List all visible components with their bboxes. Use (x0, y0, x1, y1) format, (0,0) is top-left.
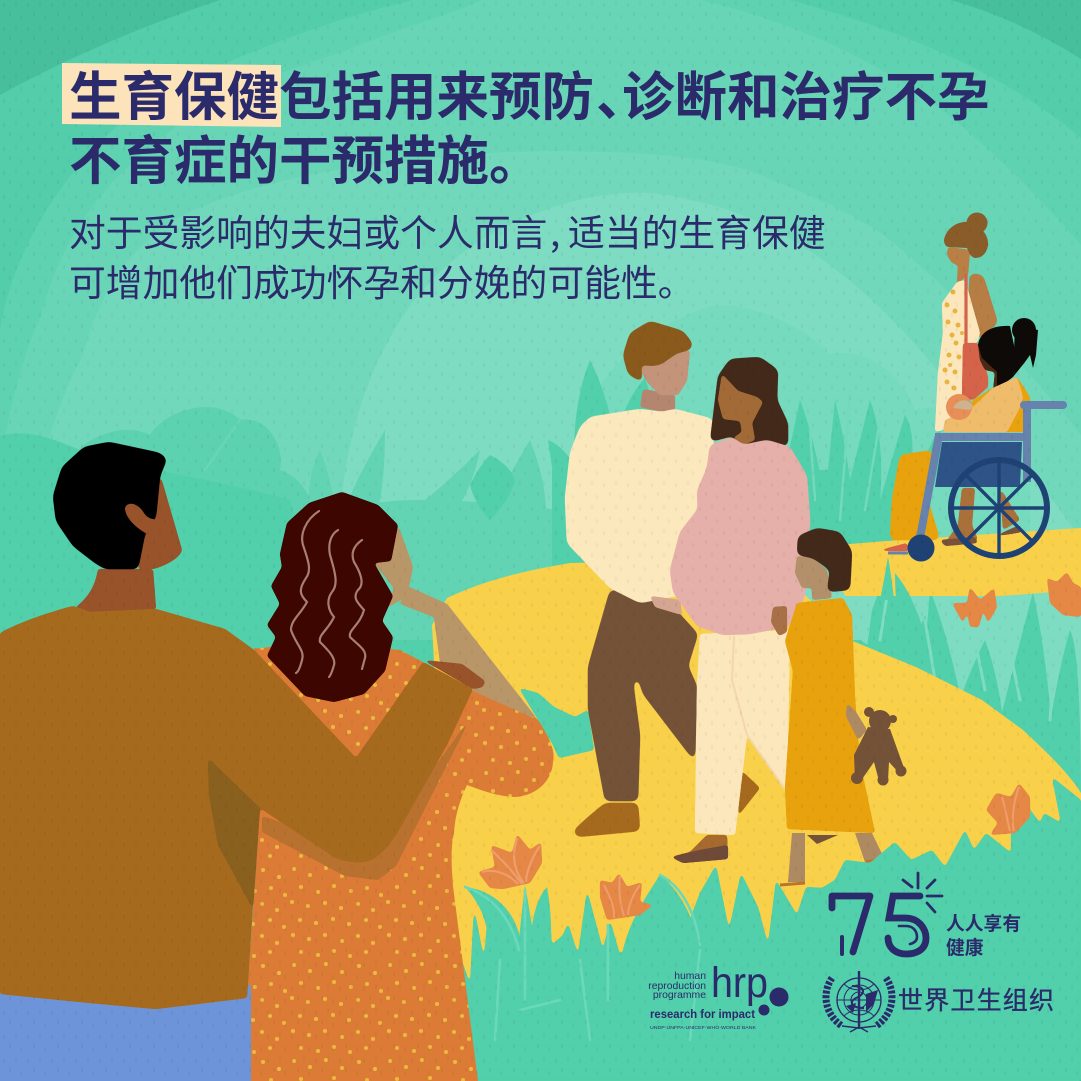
title highlight (62, 63, 281, 127)
logo: HRP (648, 959, 788, 1030)
heading: 诊断和治疗不孕 (622, 55, 990, 131)
flower: tulip band middle (952, 587, 997, 627)
logo: 75 years (832, 873, 942, 954)
background: bushes and grass (0, 306, 1030, 1000)
logo text: World Health Organization: 世界卫生组织 (898, 981, 1054, 1017)
foreground grass (452, 777, 1081, 1081)
band blades over yellow (880, 557, 912, 600)
logo: HRP: UNDP·UNFPA·UNICEF·WHO·WORLD BANK (650, 1025, 757, 1030)
logo: HRP: reproduction (648, 981, 706, 992)
yellow path (432, 528, 1081, 1000)
body text: 对于受影响的夫妇或个人而言 (69, 203, 547, 257)
figure: man in the family (565, 321, 760, 837)
logo text: health for all: 健康 (946, 933, 984, 960)
heading: 、 (596, 55, 649, 131)
flower: tulip centre (600, 873, 653, 920)
heading: 不育症的干预措施。 (69, 119, 542, 195)
logo: HRP: programme (653, 990, 706, 1001)
figure: pregnant woman (670, 357, 810, 863)
flower: tulip left (478, 834, 542, 889)
flower: tulip right lower (986, 783, 1030, 835)
flower: tulip band right (1047, 572, 1081, 617)
body text: 适当的生育保健 (568, 203, 826, 257)
logo: HRP: human (674, 971, 706, 982)
green patch beside woman's arm (519, 688, 594, 758)
figure: woman in wheelchair (880, 318, 1063, 562)
logo: HRP: research for impact (650, 1007, 755, 1021)
body text: , (550, 203, 560, 257)
figure: woman standing behind wheelchair (935, 212, 1022, 546)
logo: HRP: hrp (711, 959, 768, 1007)
figure: child with teddy bear (780, 528, 906, 885)
icon: teddy bear (851, 707, 906, 786)
figure: foreground man (0, 442, 485, 1081)
logo text: health for all: 人人享有 (946, 909, 1021, 936)
figure: foreground woman (247, 492, 554, 1081)
body text: 可增加他们成功怀孕和分娩的可能性。 (69, 253, 695, 307)
right green band with blades (840, 557, 1081, 830)
logo: WHO emblem (826, 971, 892, 1032)
heading: 生育保健包括用来预防 (69, 55, 594, 131)
